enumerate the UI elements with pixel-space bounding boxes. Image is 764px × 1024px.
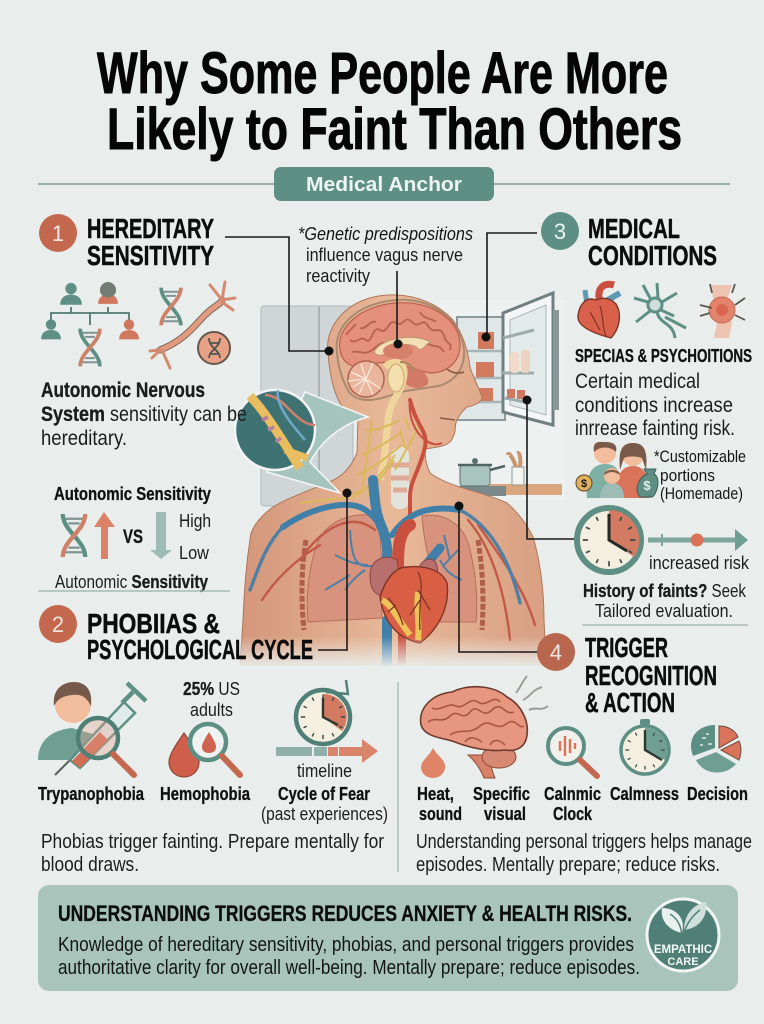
autonomic sensitivity comparison [54,484,211,592]
autonomic sensitivity comparison: Autonomic Sensitivity [55,572,208,592]
summary text: authoritative clarity for overall well-being. Mentally prepare; reduce episodes. [58,957,640,979]
blood vessels [250,400,535,662]
heart [370,557,448,643]
text: increased risk and history: increased risk [649,553,750,573]
autonomic sensitivity comparison: Low [179,543,210,563]
icon: trypanophobia person and syringe [38,682,146,775]
icon: magnifier with sound waves [548,728,597,776]
phobia labels: Cycle of Fear [278,784,370,804]
badge: empathic care: EMPATHIC [654,944,712,956]
badge 3: 3 [554,219,566,244]
description 2: Phobias trigger fainting. Prepare mentally for [41,831,384,853]
panel 3: medical conditions [541,212,752,625]
summary text [58,934,640,979]
icon: clock and risk timeline [577,508,748,572]
trigger labels: Clock [553,804,593,824]
badge: empathic care [647,899,719,971]
autonomic sensitivity comparison: High [179,511,211,531]
icon: stopwatch [621,719,669,774]
trigger labels: sound [419,804,462,824]
stat: 25% US adults: adults [190,700,233,720]
icon: nerve cell [150,282,235,368]
trigger labels: Decision [687,784,748,804]
icon: family with money: $ [643,478,651,493]
icon: family with money [576,442,658,498]
heading 2: PHOBIIAS & [87,608,220,639]
heading pill: Medical Anchor [274,167,494,201]
badge 1 [39,214,77,252]
summary heading: UNDERSTANDING TRIGGERS REDUCES ANXIETY & HEALTH RISKS. [58,901,632,926]
note: customizable portions [654,447,746,503]
trigger labels: Calnmic [544,784,601,804]
description 3 [575,346,752,440]
trigger labels: Specific [473,784,530,804]
note: customizable portions: portions [660,466,715,485]
badge 2 [39,605,77,643]
face details [440,369,464,420]
autonomic sensitivity comparison: Autonomic Sensitivity [54,484,211,504]
icon: DNA strand [161,288,181,325]
heading 1: HEREDITARY [87,213,214,244]
icon: heart [578,284,620,338]
text: increased risk and history: Tailored evaluation. [595,601,733,621]
description 3: inrrease fainting risk. [575,417,735,440]
skull and brain [337,300,464,480]
title [97,41,682,162]
icon: hemophobia blood drop [169,724,240,777]
description 2 [41,831,384,876]
heading 1: SENSITIVITY [87,240,214,271]
connector lines [225,233,575,652]
panel 2: phobias and psychological cycle [38,605,388,876]
phobia labels [38,761,388,824]
description 1: hereditary. [41,427,127,450]
text: increased risk and history: History of faints? Seek [583,581,747,601]
stat: 25% US adults [183,679,240,720]
icon: brain [421,687,527,778]
text: increased risk and history [583,553,750,621]
kitchen background [261,293,565,506]
description 2: blood draws. [41,854,139,876]
panel 1: hereditary sensitivity [38,213,247,592]
phobia labels: timeline [297,761,352,781]
stat: 25% US adults: 25% US [183,679,240,699]
badge 1: 1 [52,221,64,246]
heading 1 [87,213,214,271]
DNA magnifier callout [235,390,368,493]
icon: flame [421,748,445,778]
badge 2: 2 [52,612,64,637]
summary text: Knowledge of hereditary sensitivity, phobias, and personal triggers provides [58,934,634,956]
badge 3 [541,212,579,250]
phobia labels: Trypanophobia [38,784,145,804]
neck and vagus nerves [300,398,442,509]
trigger labels: visual [484,804,526,824]
heading 3: MEDICAL [588,213,680,244]
icon: family tree [41,282,139,366]
icon: family with money: $ [581,478,587,490]
annotation: genetic predispositions: reactivity [306,266,370,286]
icon: pink neuron [700,284,745,338]
central anatomy illustration [230,293,565,668]
description 1 [41,379,247,450]
heading pill: Medical Anchor: Medical Anchor [306,174,462,196]
heading 3: CONDITIONS [588,240,717,271]
note: customizable portions: *Customizable [654,447,746,466]
annotation: genetic predispositions: *Genetic predispositions [298,224,473,244]
icon: sound squiggles [516,676,548,710]
heading 2: PSYCHOLOGICAL CYCLE [87,634,313,665]
badge 4 [537,633,575,671]
heading 4: & ACTION [585,687,675,718]
icon: DNA badge [198,332,230,364]
trigger labels: Heat, [417,784,454,804]
description 1: Autonomic Nervous [41,379,205,402]
phobia labels: (past experiences) [261,804,388,824]
phobia labels: Hemophobia [160,784,251,804]
heading 4 [585,632,717,718]
heading 2 [87,608,313,665]
badge 4: 4 [550,640,562,665]
description 4 [416,831,752,876]
heading 4: TRIGGER [585,632,668,663]
body silhouette [240,295,546,665]
trigger labels: Calmness [610,784,679,804]
trigger labels [417,784,748,824]
icon: teal neuron [634,283,686,338]
panel: bottom summary [38,885,738,991]
heading 3 [588,213,717,271]
autonomic sensitivity comparison: VS [123,527,143,548]
icon: pie chart [691,725,741,773]
note: customizable portions: (Homemade) [660,484,743,503]
annotation: genetic predispositions: influence vagus nerve [306,245,463,265]
annotation: genetic predispositions [298,224,473,286]
description 3: Certain medical [575,370,700,393]
badge: empathic care: CARE [667,956,699,968]
lungs [302,515,483,630]
description 3: conditions increase [575,394,733,417]
panel 4: trigger recognition and action [416,632,752,876]
icon: cycle of fear clock and timeline [276,680,378,763]
description 1: System sensitivity can be [41,403,247,426]
